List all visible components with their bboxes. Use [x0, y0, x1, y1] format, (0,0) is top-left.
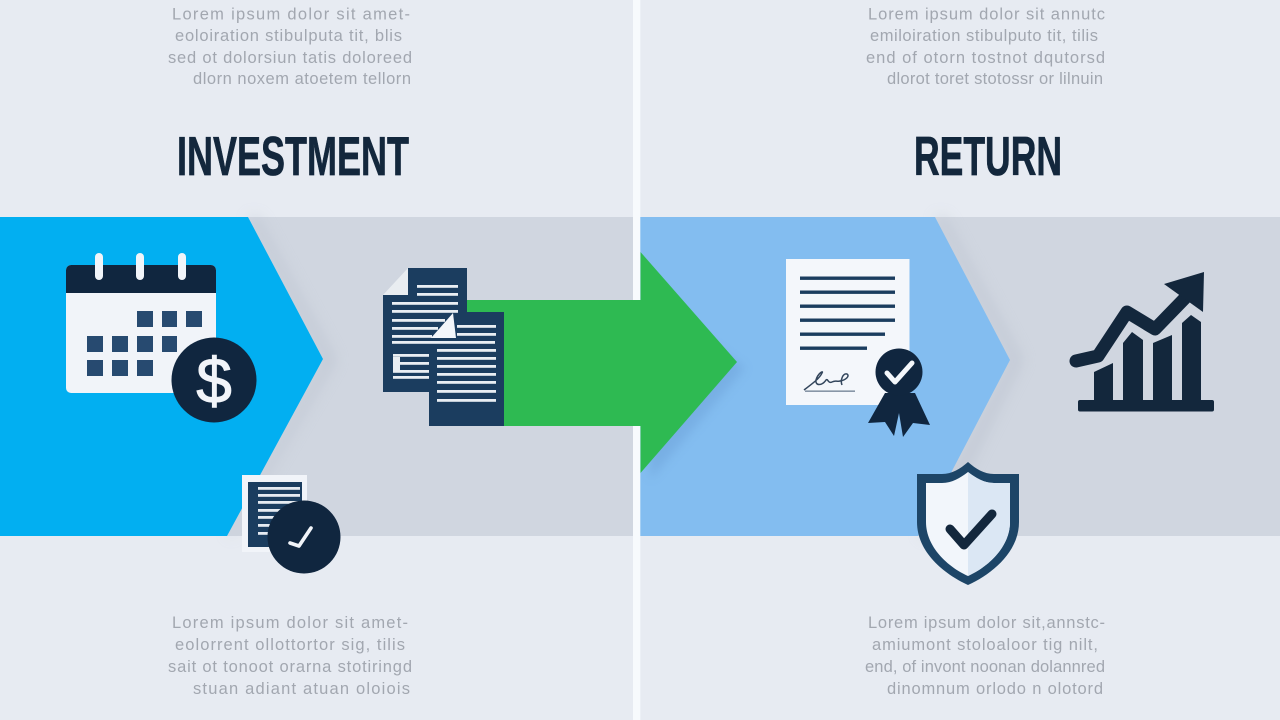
icon: certificate: [786, 259, 930, 437]
text block: investment top: sed ot dolorsiun tatis doloreed: [168, 49, 412, 67]
center divider: [633, 0, 640, 720]
icon: calendar with dollar: [66, 253, 256, 422]
text block: investment top: eoloiration stibulputa tit, blis: [175, 27, 402, 45]
text block: return top: end of otorn tostnot dqutorsd: [866, 49, 1105, 67]
text block: investment bottom: eolorrent ollottortor sig, tilis: [175, 636, 405, 654]
text block: return bottom: Lorem ipsum dolor sit,annstc-: [868, 614, 1105, 632]
panel: investment band: [0, 217, 633, 536]
text block: return top: Lorem ipsum dolor sit annutc: [868, 6, 1105, 24]
icon: shield: [917, 462, 1019, 585]
text block: investment top: dlorn noxem atoetem tellorn: [193, 70, 411, 88]
text block: return bottom: end, of invont noonan dolannred: [865, 658, 1105, 676]
text block: return top: emiloiration stibulputo tit, tilis: [870, 27, 1098, 45]
panel: return band: [640, 217, 1280, 536]
ribbon: [868, 393, 930, 437]
text block: investment bottom: Lorem ipsum dolor sit amet-: [172, 614, 408, 632]
heading: return: RETURN: [914, 125, 1062, 187]
icon: calendar with dollar: $: [196, 345, 232, 417]
icon: checklist badge: [242, 475, 340, 574]
heading: investment: INVESTMENT: [177, 125, 409, 187]
text block: investment bottom: sait ot tonoot orarna stotiringd: [168, 658, 412, 676]
text block: return bottom: dinomnum orlodo n olotord: [887, 680, 1103, 698]
icon: growth chart: [1076, 272, 1214, 412]
signature: [804, 372, 848, 390]
text block: investment bottom: [168, 614, 412, 698]
text block: return bottom: [865, 614, 1105, 698]
text block: investment top: [168, 6, 412, 88]
text block: investment top: Lorem ipsum dolor sit amet-: [172, 6, 410, 24]
text block: return top: dlorot toret stotossr or lilnuin: [887, 70, 1103, 88]
seal: [876, 348, 922, 396]
text block: investment bottom: stuan adiant atuan oloiois: [193, 680, 410, 698]
icon: documents: [383, 268, 504, 426]
arrow: green: [460, 252, 745, 480]
text block: return top: [866, 6, 1105, 88]
text block: return bottom: amiumont stoloaloor tig nilt,: [872, 636, 1098, 654]
